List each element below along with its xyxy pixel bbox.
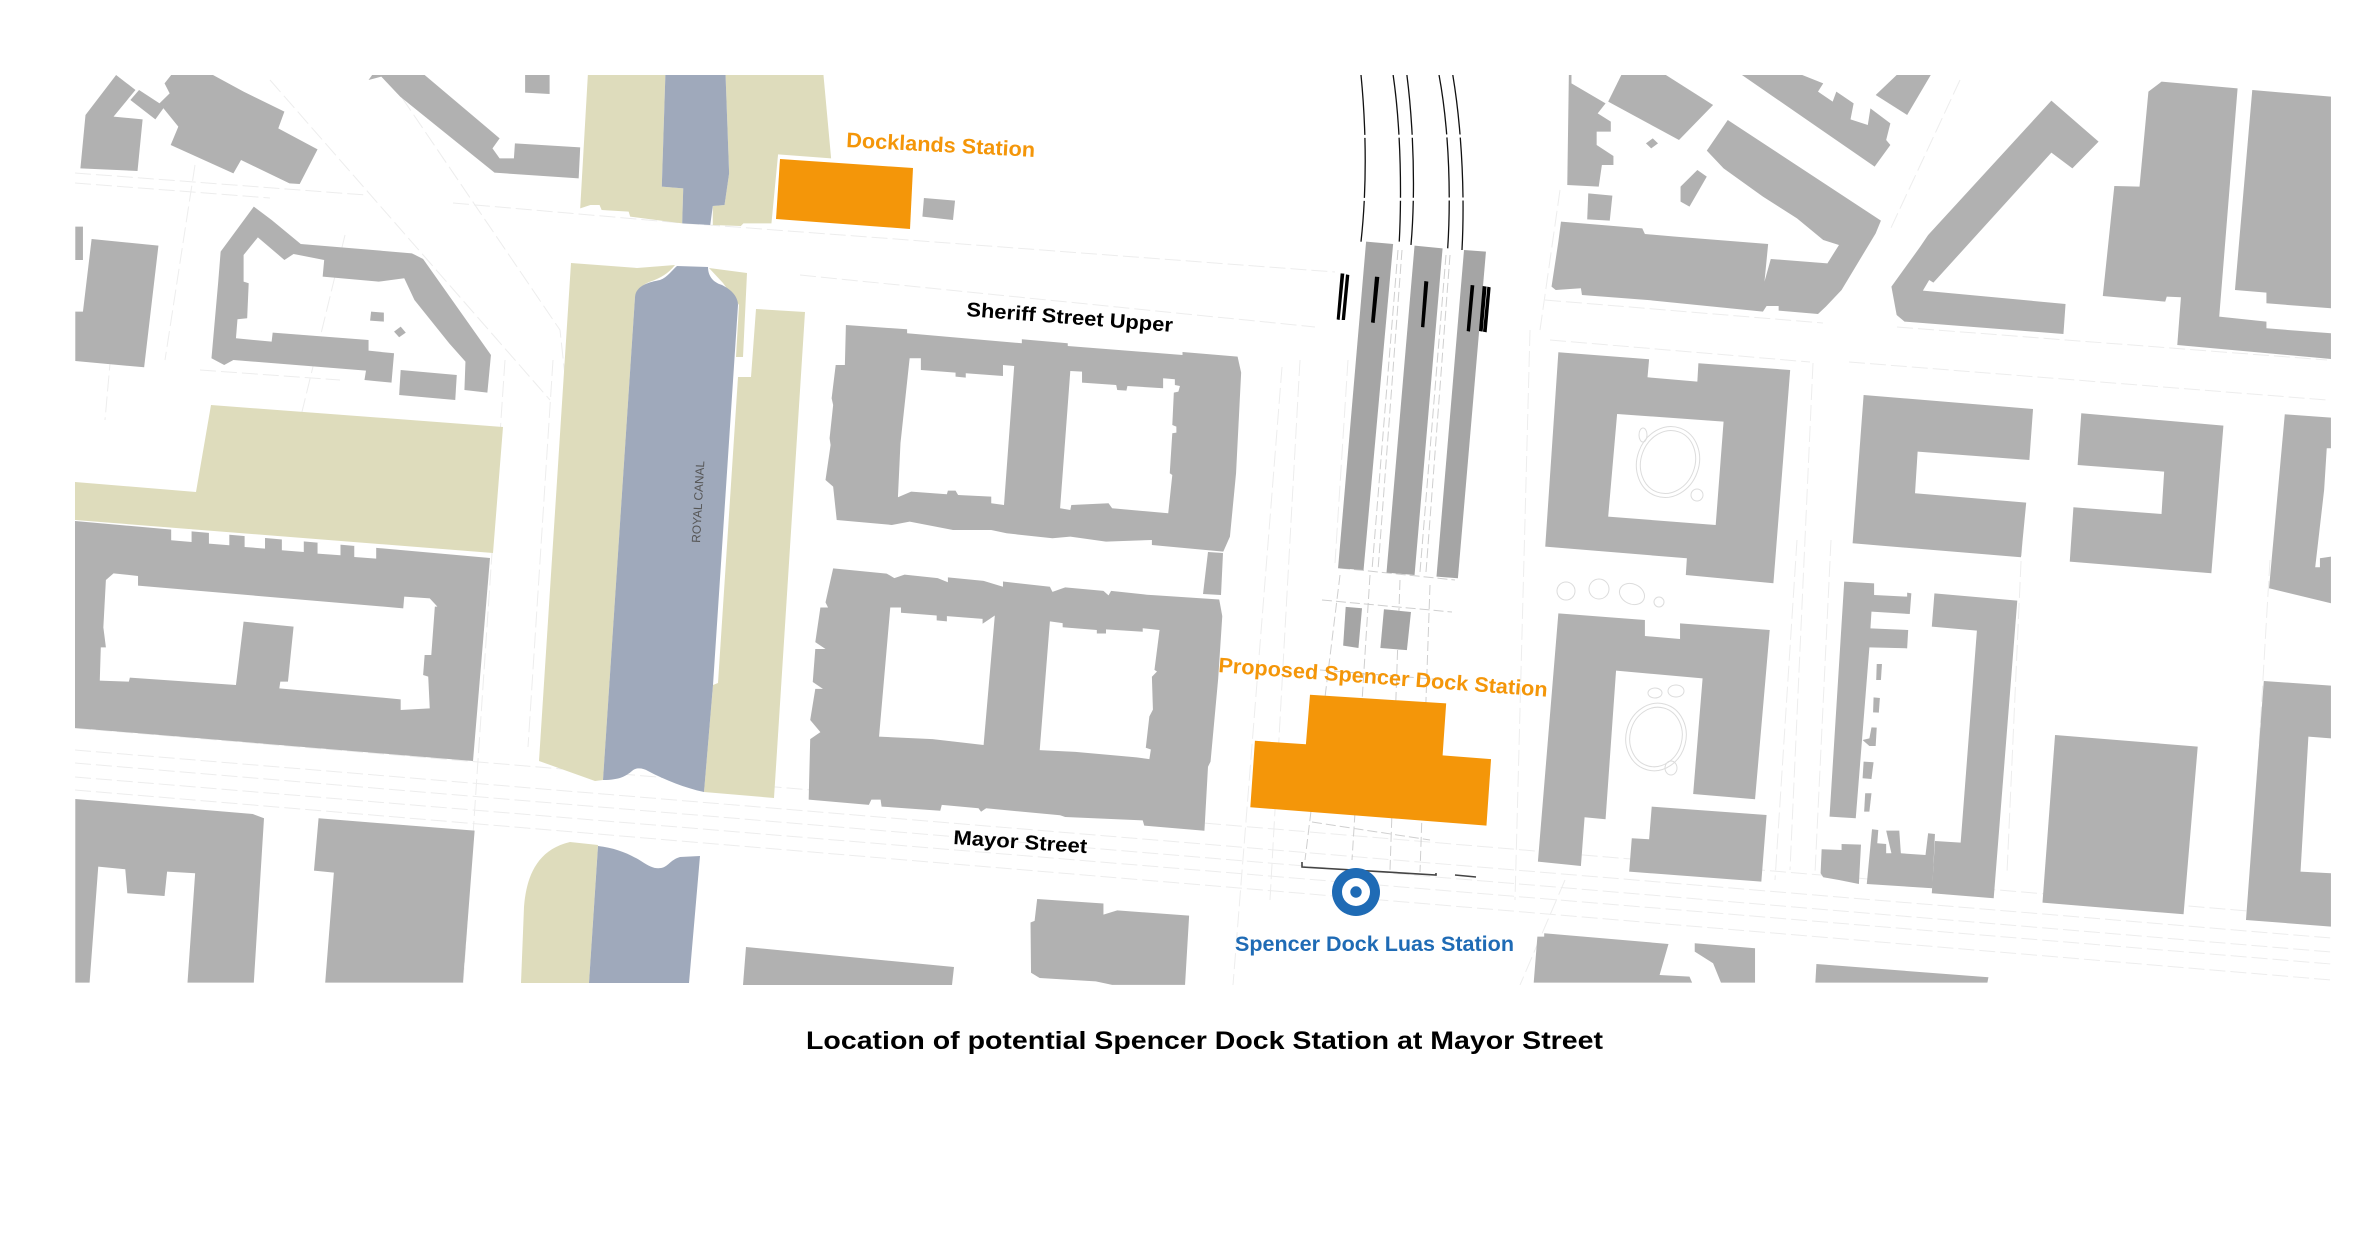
station edge line [1302,862,1476,877]
residential block north [826,198,1241,552]
railway tracks [1361,75,1463,250]
royal canal label: ROYAL CANAL [689,460,707,543]
rail platforms [1338,242,1486,650]
station grid outlines [1305,250,1455,872]
buildings west [75,75,954,985]
residential block south [809,568,1222,985]
buildings south-east [1534,582,2331,983]
label: spencer dock luas station: Spencer Dock Luas Station [1235,933,1514,956]
caption: Location of potential Spencer Dock Station at Mayor Street [806,1027,1604,1055]
docklands station footprint [776,159,913,229]
label: docklands station: Docklands Station [846,129,1036,162]
label: mayor street: Mayor Street [953,827,1088,858]
black rail bars [1337,273,1491,332]
label: sheriff street upper: Sheriff Street Upper [966,299,1174,337]
terrace courtyard [100,529,437,710]
buildings north-east [1545,75,2331,603]
royal canal water [589,75,738,983]
road outlines [75,80,2331,985]
label: proposed spencer dock station: Proposed Spencer Dock Station [1218,654,1548,702]
courtyard ponds [1557,418,1709,778]
site map [75,75,2331,985]
parks [75,75,831,983]
icon: luas stop [1332,868,1380,916]
proposed spencer dock station footprint [1250,695,1491,826]
